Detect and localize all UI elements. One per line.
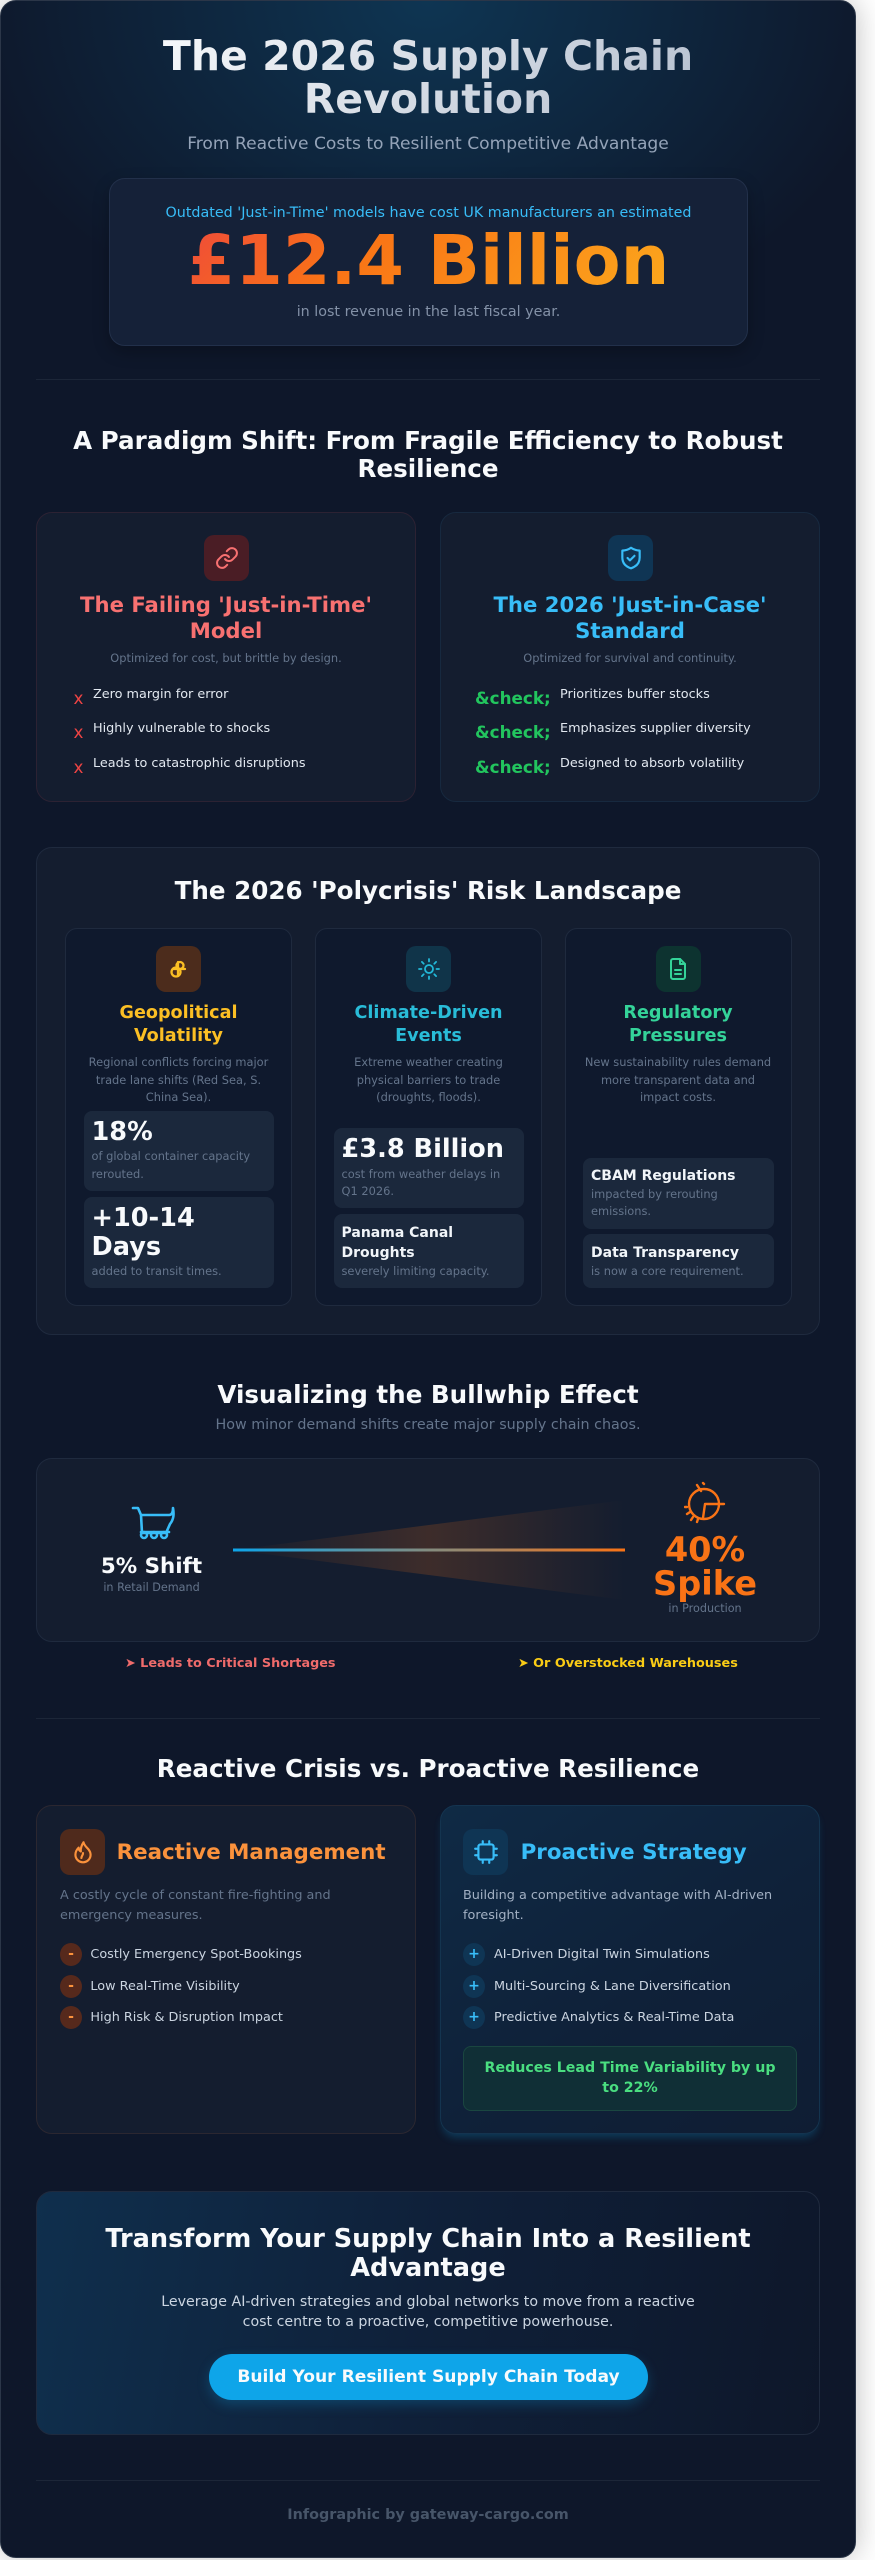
card description: [60, 1888, 331, 1923]
column description: (droughts, floods).: [376, 1090, 481, 1104]
icon: production gear clock: [684, 1482, 726, 1524]
list of strengths: Designed to absorb volatility: [560, 756, 744, 771]
column description: New sustainability rules demand: [585, 1055, 771, 1069]
column description: impact costs.: [640, 1090, 716, 1104]
stat: cbam: [583, 1158, 774, 1229]
stat: transit days: added to transit times.: [92, 1264, 222, 1278]
card title: [80, 592, 372, 643]
stat: panama canal: Droughts: [342, 1245, 415, 1261]
chart: bullwhip fan: [233, 1506, 625, 1594]
icon: document: [656, 946, 700, 992]
stat: 18 percent: [84, 1111, 274, 1191]
cta heading: Transform Your Supply Chain Into a Resilient: [105, 2224, 751, 2254]
list of failings: Zero margin for error: [93, 687, 228, 702]
heading: comparison: Reactive Crisis vs. Proactive Resilience: [157, 1754, 699, 1783]
stat: cbam: CBAM Regulations: [591, 1168, 736, 1184]
stat: 5 percent shift: in Retail Demand: [103, 1581, 200, 1594]
list of proactive measures: Multi-Sourcing & Lane Diversification: [494, 1979, 731, 1994]
cta text: Leverage AI-driven strategies and global networks to move from a reactive: [161, 2294, 695, 2310]
hero caption: in lost revenue in the last fiscal year.: [297, 304, 560, 320]
stat: panama canal: Panama Canal: [342, 1225, 453, 1241]
heading: paradigm shift: Resilience: [358, 454, 498, 483]
stat: 5 percent shift: [101, 1554, 202, 1594]
stat: data transparency: [583, 1234, 774, 1288]
heading: paradigm shift: A Paradigm Shift: From Fragile Efficiency to Robust: [73, 426, 783, 455]
icon: cart: [132, 1506, 175, 1540]
cta heading: Advantage: [350, 2253, 506, 2283]
stat: 40 percent spike: 40%: [665, 1530, 745, 1569]
header: [163, 32, 693, 154]
list of strengths: &check;: [475, 688, 551, 708]
risk column: climate: [315, 928, 542, 1306]
panel: proactive strategy: [440, 1805, 820, 2134]
stat: weather cost: Q1 2026.: [342, 1184, 394, 1198]
list of proactive measures: +: [468, 1978, 480, 1994]
column title: [354, 1003, 503, 1046]
card description: [463, 1888, 772, 1923]
stat: panama canal: [334, 1214, 524, 1288]
icon: flame: [60, 1829, 105, 1875]
panel: reactive management: [36, 1805, 416, 2134]
list of proactive measures: +: [468, 1946, 480, 1962]
list of failings: x: [74, 722, 83, 742]
list of failings: x: [74, 757, 83, 777]
column description: trade lane shifts (Red Sea, S.: [96, 1073, 261, 1087]
list of proactive measures: [463, 1943, 734, 2029]
cta text: cost centre to a proactive, competitive powerhouse.: [243, 2314, 613, 2330]
hero lead-in: Outdated 'Just-in-Time' models have cost UK manufacturers an estimated: [166, 205, 691, 221]
stat: transit days: [84, 1197, 274, 1288]
card title: Reactive Management: [117, 1840, 386, 1865]
footer: Infographic by gateway-cargo.com: [287, 2507, 569, 2523]
list of proactive measures: Predictive Analytics & Real-Time Data: [494, 2010, 734, 2025]
risk column: regulatory: [564, 928, 792, 1306]
column title: Volatility: [134, 1026, 223, 1046]
stat: cbam: impacted by rerouting: [591, 1186, 718, 1200]
list of failings: [74, 687, 306, 777]
column title: Pressures: [629, 1026, 727, 1046]
list of proactive measures: +: [468, 2009, 480, 2025]
stat: 40 percent spike: [653, 1530, 757, 1615]
column description: Regional conflicts forcing major: [89, 1055, 268, 1069]
stat: weather cost: [334, 1128, 524, 1208]
panel: just-in-case: [440, 512, 820, 802]
column title: Geopolitical: [120, 1003, 237, 1023]
stat: 5 percent shift: 5% Shift: [101, 1554, 202, 1579]
list of strengths: Emphasizes supplier diversity: [560, 721, 751, 736]
outcome: overstock: ➤ Or Overstocked Warehouses: [518, 1656, 738, 1671]
card description: A costly cycle of constant fire-fighting and: [60, 1888, 331, 1903]
list of reactive issues: Low Real-Time Visibility: [90, 1979, 240, 1994]
stat: 18 percent: of global container capacity: [92, 1149, 250, 1163]
list of reactive issues: -: [68, 1946, 74, 1962]
risk column: geopolitical: [65, 928, 292, 1306]
list of reactive issues: High Risk & Disruption Impact: [90, 2010, 283, 2025]
card title: Model: [190, 618, 262, 643]
list of strengths: &check;: [475, 722, 551, 742]
icon: chip: [463, 1829, 508, 1875]
stat: 18 percent: 18%: [92, 1117, 153, 1147]
column description: Extreme weather creating: [354, 1055, 503, 1069]
cta button: Build Your Resilient Supply Chain Today: [237, 2367, 620, 2387]
heading: paradigm shift: [73, 426, 783, 483]
stat: 40 percent spike: in Production: [668, 1602, 742, 1615]
bullwhip subtitle: How minor demand shifts create major supply chain chaos.: [215, 1417, 641, 1433]
stat: cbam: emissions.: [591, 1204, 651, 1218]
column title: Events: [395, 1026, 462, 1046]
heading: bullwhip: Visualizing the Bullwhip Effect: [217, 1380, 639, 1409]
stat: transit days: +10-14: [92, 1203, 195, 1233]
icon: geopolitical: [156, 946, 201, 992]
list of failings: x: [74, 688, 83, 708]
list of strengths: &check;: [475, 757, 551, 777]
stat: 18 percent: rerouted.: [92, 1167, 144, 1181]
stat: weather cost: cost from weather delays in: [342, 1167, 500, 1181]
card description: emergency measures.: [60, 1908, 203, 1923]
card title: Proactive Strategy: [521, 1840, 747, 1865]
list of reactive issues: Costly Emergency Spot-Bookings: [90, 1947, 302, 1962]
list of failings: Leads to catastrophic disruptions: [93, 756, 306, 771]
card subtitle: Optimized for survival and continuity.: [523, 651, 737, 665]
cta text: [161, 2294, 695, 2330]
cta heading: [105, 2224, 751, 2283]
icon: shield: [608, 535, 653, 581]
list of strengths: [475, 687, 751, 777]
column title: [120, 1003, 237, 1046]
heading: risk landscape: The 2026 'Polycrisis' Risk Landscape: [175, 876, 681, 904]
title: Revolution: [304, 75, 552, 123]
stat: panama canal: severely limiting capacity.: [342, 1264, 490, 1278]
callout: lead time: Reduces Lead Time Variability by up: [485, 2060, 775, 2076]
stat: weather cost: £3.8 Billion: [342, 1134, 504, 1164]
column title: [623, 1003, 733, 1046]
column description: [354, 1055, 503, 1104]
column description: more transparent data and: [601, 1073, 755, 1087]
stat: data transparency: is now a core requirement.: [591, 1264, 744, 1278]
card description: Building a competitive advantage with AI-driven: [463, 1888, 772, 1903]
panel: call to action: [36, 2191, 820, 2435]
stat: transit days: Days: [92, 1232, 161, 1262]
hero figure: £12.4 Billion: [188, 222, 669, 301]
list of reactive issues: [60, 1943, 302, 2029]
list of strengths: Prioritizes buffer stocks: [560, 687, 710, 702]
card title: Standard: [575, 618, 685, 643]
panel: just-in-time: [36, 512, 416, 802]
list of reactive issues: -: [68, 2009, 74, 2025]
list of failings: Highly vulnerable to shocks: [93, 721, 270, 736]
card description: foresight.: [463, 1908, 524, 1923]
column description: physical barriers to trade: [357, 1073, 500, 1087]
card title: The 2026 'Just-in-Case': [493, 592, 767, 617]
column description: [585, 1055, 771, 1104]
column description: [89, 1055, 268, 1104]
card title: The Failing 'Just-in-Time': [80, 592, 372, 617]
icon: sun: [406, 946, 451, 992]
column title: Climate-Driven: [354, 1003, 503, 1023]
callout: lead time: [463, 2046, 797, 2111]
callout: lead time: to 22%: [602, 2080, 658, 2096]
list of proactive measures: AI-Driven Digital Twin Simulations: [494, 1947, 710, 1962]
panel: bullwhip chart: [36, 1458, 820, 1642]
cta button: [209, 2354, 648, 2400]
hero stat panel: [109, 178, 748, 346]
title: The 2026 Supply Chain: [163, 32, 693, 80]
stat: data transparency: Data Transparency: [591, 1245, 739, 1261]
icon: broken link: [204, 535, 249, 581]
outcome: shortages: ➤ Leads to Critical Shortages: [125, 1656, 336, 1671]
column description: China Sea).: [146, 1090, 211, 1104]
stat: 40 percent spike: Spike: [653, 1564, 757, 1603]
panel: risk landscape: [36, 847, 820, 1335]
card title: [493, 592, 767, 643]
subtitle: From Reactive Costs to Resilient Competitive Advantage: [187, 134, 669, 154]
column title: Regulatory: [623, 1003, 733, 1023]
list of reactive issues: -: [68, 1978, 74, 1994]
card subtitle: Optimized for cost, but brittle by design.: [110, 651, 342, 665]
title: [0, 35, 856, 121]
